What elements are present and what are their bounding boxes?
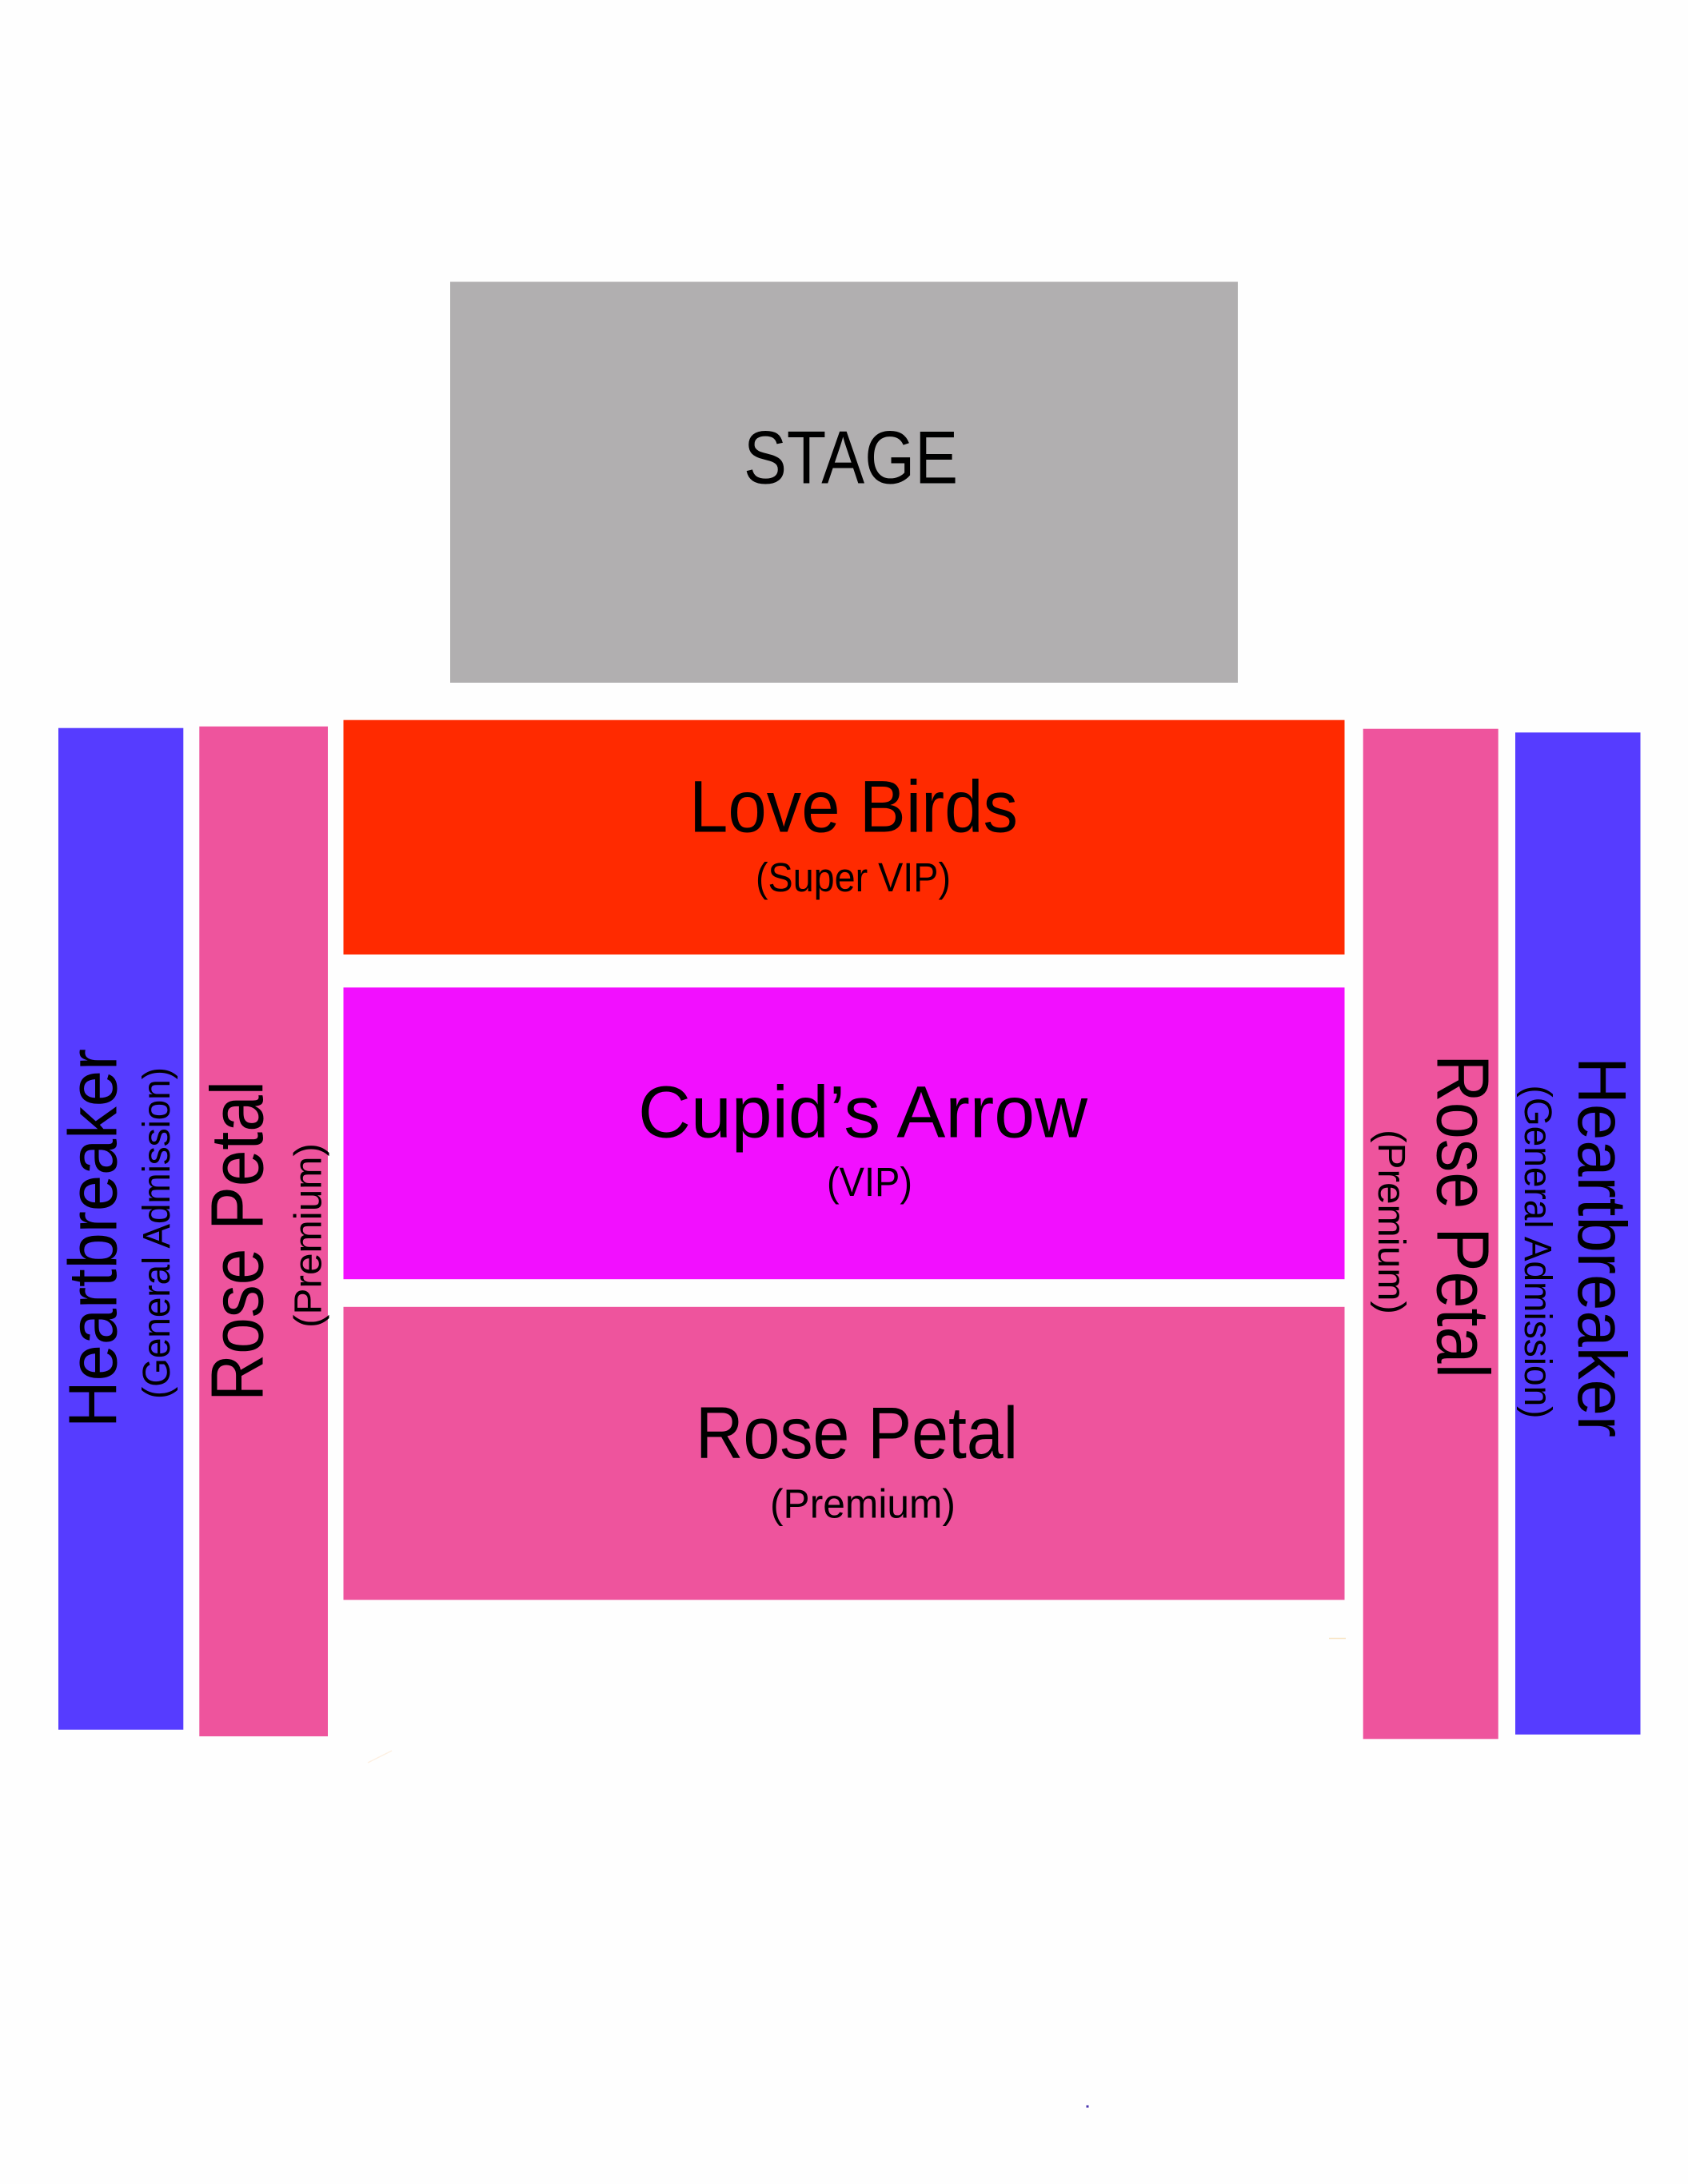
panel: Love Birds section [344,720,1345,955]
right Premium subtitle: (Premium) [1370,1130,1412,1314]
panel: center Rose Petal section [344,1307,1345,1600]
left Heartbreaker background [58,728,183,1730]
Premium subtitle: (Premium) [770,1481,956,1526]
left General Admission subtitle: (General Admission) [136,1067,178,1399]
right Heartbreaker background [1515,732,1641,1735]
stage label: STAGE [744,416,958,500]
Love Birds background [344,720,1345,955]
center Rose Petal background [344,1307,1345,1600]
Love Birds heading: Love Birds [689,767,1018,848]
Super VIP subtitle: (Super VIP) [756,855,951,900]
VIP subtitle: (VIP) [827,1159,912,1205]
left Rose Petal background [199,727,328,1736]
stage background [450,281,1238,683]
panel: left Heartbreaker section [55,728,183,1730]
right Heartbreaker heading: Heartbreaker [1563,1057,1639,1437]
panel: stage [450,281,1238,683]
right General Admission subtitle: (General Admission) [1516,1086,1558,1418]
left Heartbreaker heading: Heartbreaker [55,1049,131,1428]
center Rose Petal heading: Rose Petal [696,1393,1018,1474]
panel: left Rose Petal section [195,727,329,1736]
left Rose Petal heading: Rose Petal [195,1081,278,1401]
left Premium subtitle: (Premium) [288,1143,329,1328]
Cupid's Arrow background [344,987,1345,1279]
panel: right Heartbreaker section [1515,732,1641,1735]
panel: Cupid's Arrow section [344,987,1345,1279]
right Rose Petal background [1363,729,1498,1739]
Cupid's Arrow heading: Cupid’s Arrow [638,1072,1088,1154]
panel: right Rose Petal section [1363,729,1504,1739]
right Rose Petal heading: Rose Petal [1421,1054,1504,1378]
